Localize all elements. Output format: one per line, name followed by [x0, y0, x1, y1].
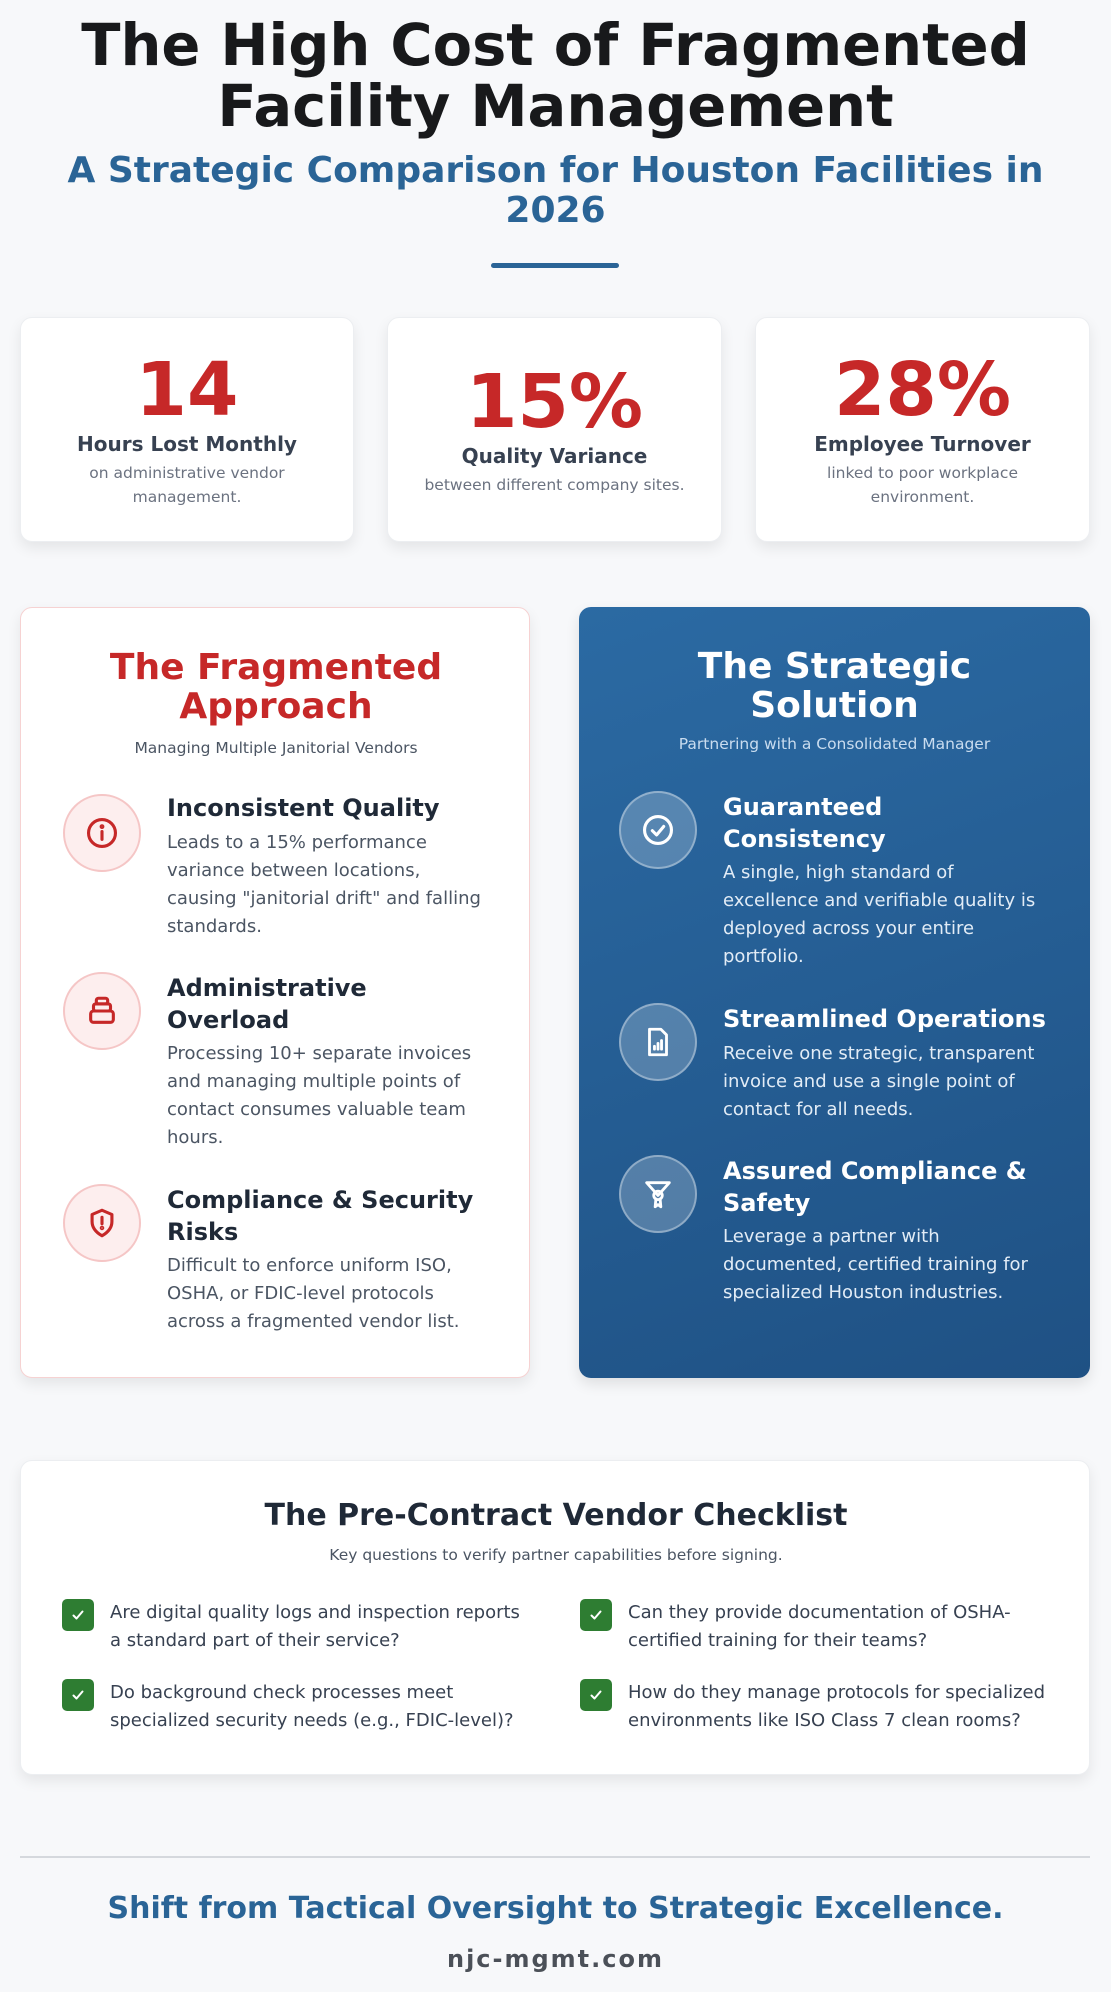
- stat card: quality variance: 15%: [466, 359, 643, 445]
- item: streamlined operations: Streamlined Operations: [723, 1005, 1046, 1033]
- item: administrative overload: Processing 10+ separate invoices and managing multiple points of contact consumes valuable team hours.: [167, 1043, 471, 1148]
- item: compliance risks: Risks: [167, 1218, 238, 1246]
- checklist heading: The Pre-Contract Vendor Checklist: [265, 1498, 847, 1533]
- stat card: quality variance: between different company sites.: [424, 476, 685, 494]
- icon: document chart: [619, 1003, 697, 1081]
- item: administrative overload: Overload: [167, 1006, 289, 1034]
- stat card: hours lost: [20, 317, 354, 542]
- footer tagline: Shift from Tactical Oversight to Strategic Excellence.: [107, 1891, 1004, 1926]
- stat card: turnover: Employee Turnover: [814, 432, 1031, 456]
- panel heading: [698, 646, 971, 726]
- panel heading: Solution: [750, 685, 919, 726]
- title: The High Cost of Fragmented: [81, 12, 1030, 79]
- item: guaranteed consistency: Guaranteed: [723, 793, 882, 821]
- item: administrative overload: [63, 972, 471, 1148]
- item: guaranteed consistency: [619, 791, 1035, 967]
- stat card: hours lost: on administrative vendor management.: [89, 464, 285, 506]
- icon: shield: [63, 1184, 141, 1262]
- panel heading: Approach: [179, 686, 373, 727]
- panel: strategic solution: [579, 607, 1090, 1378]
- panel heading: The Fragmented: [110, 647, 442, 688]
- stat card: quality variance: [387, 317, 722, 542]
- stat card: turnover: 28%: [834, 347, 1011, 433]
- checklist item 3: Do background check processes meet specialized security needs (e.g., FDIC-level)?: [110, 1682, 514, 1731]
- item: assured compliance: Leverage a partner with documented, certified training for specialized Houston industries.: [723, 1226, 1028, 1303]
- checklist subheading: Key questions to verify partner capabilities before signing.: [329, 1546, 783, 1564]
- item: compliance risks: [63, 1184, 473, 1332]
- panel: fragmented approach: [20, 607, 530, 1378]
- item: guaranteed consistency: Consistency: [723, 825, 886, 853]
- checklist item 4: How do they manage protocols for specialized environments like ISO Class 7 clean rooms?: [628, 1682, 1045, 1731]
- item: assured compliance: Safety: [723, 1189, 810, 1217]
- stat card: turnover: [755, 317, 1090, 542]
- title: [81, 12, 1030, 140]
- item: compliance risks: Difficult to enforce uniform ISO, OSHA, or FDIC-level protocols across a fragmented vendor list.: [167, 1255, 460, 1332]
- panel subheading: Managing Multiple Janitorial Vendors: [134, 739, 418, 757]
- icon: stack: [63, 972, 141, 1050]
- checklist item 2: Can they provide documentation of OSHA-certified training for their teams?: [628, 1602, 1011, 1651]
- title: Facility Management: [217, 73, 894, 140]
- item: compliance risks: Compliance & Security: [167, 1186, 473, 1214]
- subtitle: A Strategic Comparison for Houston Facilities in 2026: [67, 150, 1044, 231]
- icon: check circle: [619, 791, 697, 869]
- item: inconsistent quality: Inconsistent Quality: [167, 794, 440, 822]
- item: guaranteed consistency: A single, high standard of excellence and verifiable quality is deployed across your entire portfolio.: [723, 862, 1035, 967]
- item: inconsistent quality: [63, 794, 481, 937]
- footer url: njc-mgmt.com: [447, 1945, 664, 1973]
- stat card: turnover: linked to poor workplace environment.: [827, 464, 1018, 506]
- panel subheading: Partnering with a Consolidated Manager: [679, 735, 990, 753]
- stat card: quality variance: Quality Variance: [462, 444, 647, 468]
- item: streamlined operations: [619, 1003, 1046, 1120]
- divider accent: [491, 263, 619, 268]
- stat card: hours lost: 14: [136, 347, 238, 433]
- panel heading: [110, 647, 442, 727]
- panel: vendor checklist: [20, 1460, 1090, 1775]
- checklist item 1: Are digital quality logs and inspection reports a standard part of their service?: [110, 1602, 520, 1651]
- item: assured compliance: Assured Compliance &: [723, 1157, 1027, 1185]
- panel heading: The Strategic: [698, 646, 971, 687]
- item: assured compliance: [619, 1155, 1028, 1303]
- item: administrative overload: Administrative: [167, 974, 367, 1002]
- icon: info: [63, 794, 141, 872]
- item: streamlined operations: Receive one strategic, transparent invoice and use a single point of contact for all needs.: [723, 1043, 1034, 1120]
- stat card: hours lost: Hours Lost Monthly: [77, 432, 297, 456]
- item: inconsistent quality: Leads to a 15% performance variance between locations, causing "janitorial drift" and falling standards.: [167, 832, 481, 937]
- icon: certified badge: [619, 1155, 697, 1233]
